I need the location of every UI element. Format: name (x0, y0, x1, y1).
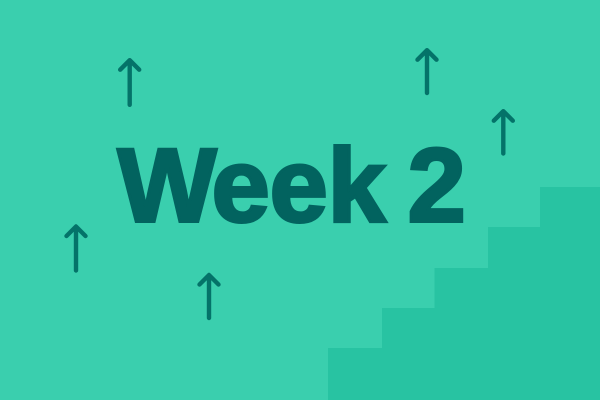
title: Week 2 (118, 128, 466, 244)
staircase (328, 187, 600, 400)
arrow 4 (66, 226, 86, 270)
arrow 1 (120, 60, 139, 105)
arrow 2 (418, 50, 436, 93)
arrow 5 (200, 275, 218, 318)
arrow 3 (494, 111, 513, 154)
